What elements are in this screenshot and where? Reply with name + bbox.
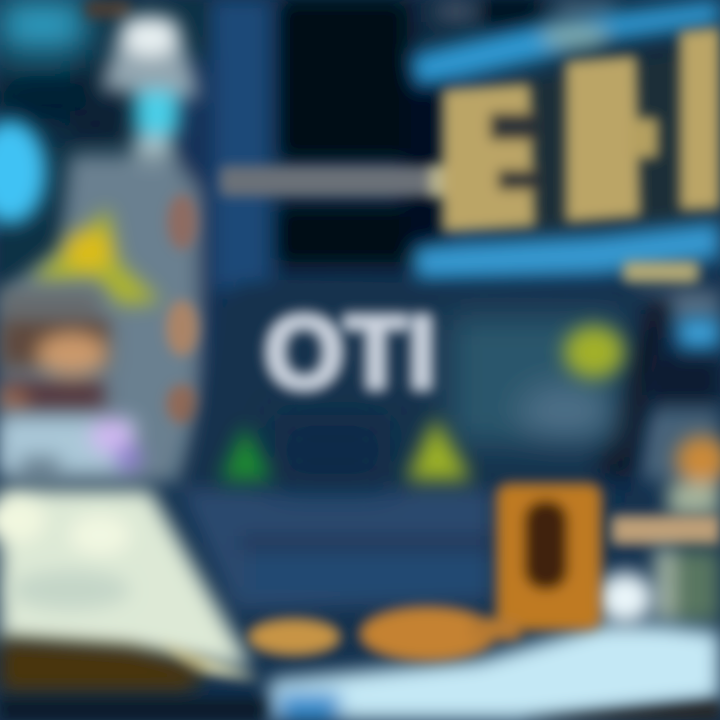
horizontal gray bar (220, 165, 470, 197)
book: left (443, 84, 542, 232)
screen panel (275, 315, 620, 485)
laptop body (178, 285, 665, 615)
green jar (655, 548, 720, 622)
laptop hinge shadow (596, 300, 672, 480)
bottom edge (0, 698, 265, 720)
right side objects (612, 318, 720, 622)
coins (248, 607, 520, 661)
dark brown top spot (85, 0, 130, 18)
left coin (248, 619, 340, 655)
table surface (270, 572, 720, 720)
book backing (490, 45, 720, 235)
dark table edge (520, 700, 720, 720)
orange jar (668, 436, 720, 516)
white highlight (597, 572, 653, 624)
book: middle (566, 56, 658, 222)
flask (100, 16, 200, 162)
laptop (178, 285, 672, 615)
blue spot (678, 318, 720, 348)
side orange dots (166, 194, 198, 424)
blue circle (0, 120, 46, 224)
light strip and purple spot (0, 418, 142, 475)
lower shelf (412, 222, 720, 280)
brown stack (0, 290, 110, 410)
shelves with books (410, 0, 720, 282)
book pages (0, 490, 262, 680)
green marker (220, 425, 272, 480)
book: right (680, 28, 720, 210)
right coin (360, 607, 496, 661)
tan shelf label (624, 262, 698, 282)
book cover (0, 640, 205, 692)
left side objects (0, 0, 200, 475)
orange cup (497, 484, 601, 630)
yellow triangle (30, 208, 162, 305)
open book (0, 490, 265, 720)
tan table bar (612, 516, 720, 544)
yellow-green marker (406, 418, 472, 480)
screen heading: OTI (264, 295, 436, 411)
teal globe (0, 0, 90, 120)
yellow-green spot (564, 326, 624, 378)
upper shelf (410, 0, 720, 88)
